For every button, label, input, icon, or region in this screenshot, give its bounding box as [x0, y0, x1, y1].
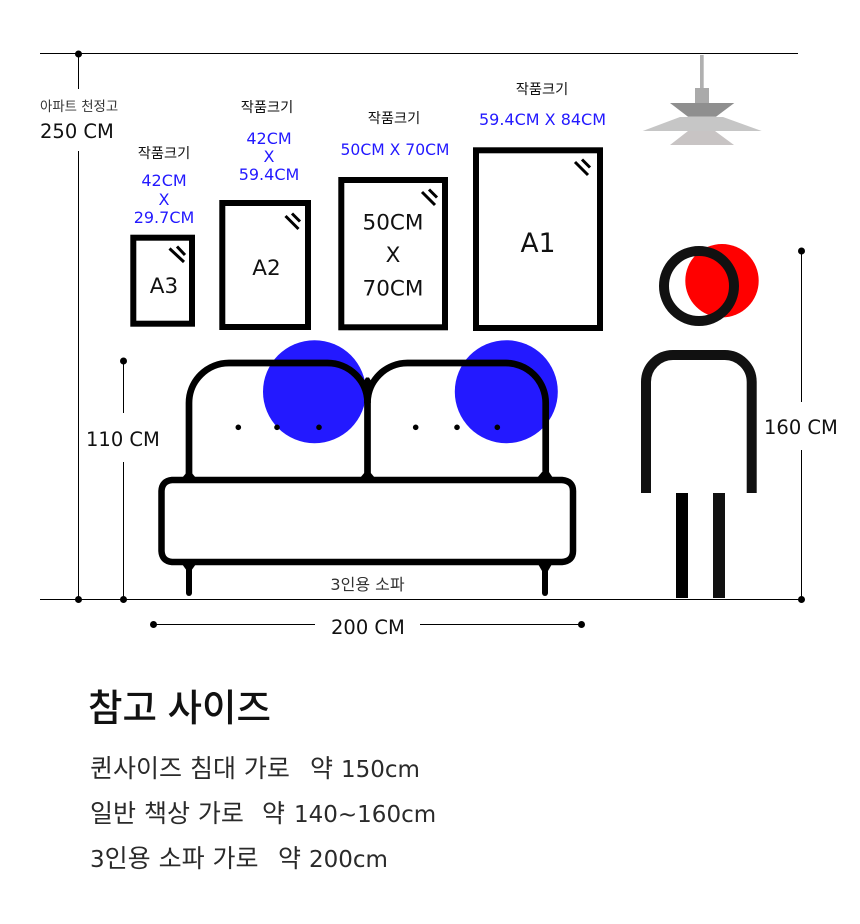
frame A2 with caption — [222, 99, 308, 327]
frame A1 with caption: 작품크기 — [516, 81, 568, 98]
icon: three-seat sofa — [162, 363, 573, 593]
frame A3 with caption: A3 — [150, 274, 178, 299]
reference size list: 일반 책상 가로 — [90, 799, 244, 828]
frame 50x70 with caption: 50CM X 70CM — [341, 141, 449, 159]
frame 50x70 with caption: 70CM — [363, 276, 423, 302]
reference size list: 150cm — [341, 757, 420, 783]
frame A3 with caption: 29.7CM — [134, 208, 194, 227]
sofa joints — [182, 378, 553, 571]
icon: person body — [646, 355, 752, 598]
reference size list: 3인용 소파 가로 — [90, 844, 259, 873]
reference size list: 약 — [278, 844, 301, 873]
sofa legs — [189, 565, 545, 593]
frame A1 with caption — [476, 81, 606, 328]
floor line — [40, 599, 803, 600]
dimension: apartment ceiling height 250 CM: 아파트 천정고 — [40, 99, 118, 115]
dimension: sofa width 200 CM: 200 CM — [331, 616, 405, 639]
frame A3 with caption — [133, 145, 194, 324]
reference size list: 약 — [310, 754, 333, 783]
frame A3 with caption: 42CM — [141, 171, 187, 190]
dimension: person height 160 CM: 160 CM — [764, 416, 838, 439]
frame A2 with caption: 59.4CM — [239, 165, 299, 184]
frame 50x70 with caption — [341, 110, 449, 327]
frame 50x70 with caption: 50CM — [363, 210, 423, 236]
reference size list: 퀸사이즈 침대 가로 — [90, 754, 290, 783]
sofa back cushions — [189, 363, 546, 478]
red circle: head accent — [685, 244, 759, 317]
ceiling line — [40, 53, 798, 54]
frame A2 with caption: X — [264, 147, 275, 166]
dimension: sofa height 110 CM: 110 CM — [86, 428, 160, 451]
reference size list: 140~160cm — [294, 802, 436, 828]
dimension: sofa width 200 CM — [150, 616, 585, 639]
dimension: sofa height 110 CM — [86, 358, 160, 603]
frame A1 with caption: 59.4CM X 84CM — [479, 110, 606, 129]
reference size list: 약 — [262, 799, 285, 828]
heading: reference sizes: 참고 사이즈 — [88, 677, 271, 732]
frame A2 with caption: 작품크기 — [241, 99, 293, 116]
frame A1 with caption: A1 — [520, 228, 556, 259]
sofa label: 3인용 소파 — [330, 575, 405, 594]
frame 50x70 with caption: 작품크기 — [368, 110, 420, 127]
frame A2 with caption: A2 — [252, 256, 281, 281]
dimension: person height 160 CM — [764, 248, 838, 603]
sofa seat — [162, 480, 573, 562]
blue circles behind sofa — [263, 340, 558, 443]
dimension: apartment ceiling height 250 CM — [40, 50, 118, 603]
dimension: apartment ceiling height 250 CM: 250 CM — [40, 120, 114, 143]
reference size list — [90, 754, 436, 873]
icon: pendant lamp — [643, 55, 762, 145]
frame 50x70 with caption: X — [386, 243, 401, 268]
frame A2 with caption: 42CM — [246, 129, 292, 148]
frame A3 with caption: 작품크기 — [138, 145, 190, 162]
sofa dots — [236, 424, 500, 430]
reference size list: 200cm — [309, 847, 388, 873]
frame A3 with caption: X — [159, 190, 170, 209]
icon: person head ring — [664, 251, 734, 321]
